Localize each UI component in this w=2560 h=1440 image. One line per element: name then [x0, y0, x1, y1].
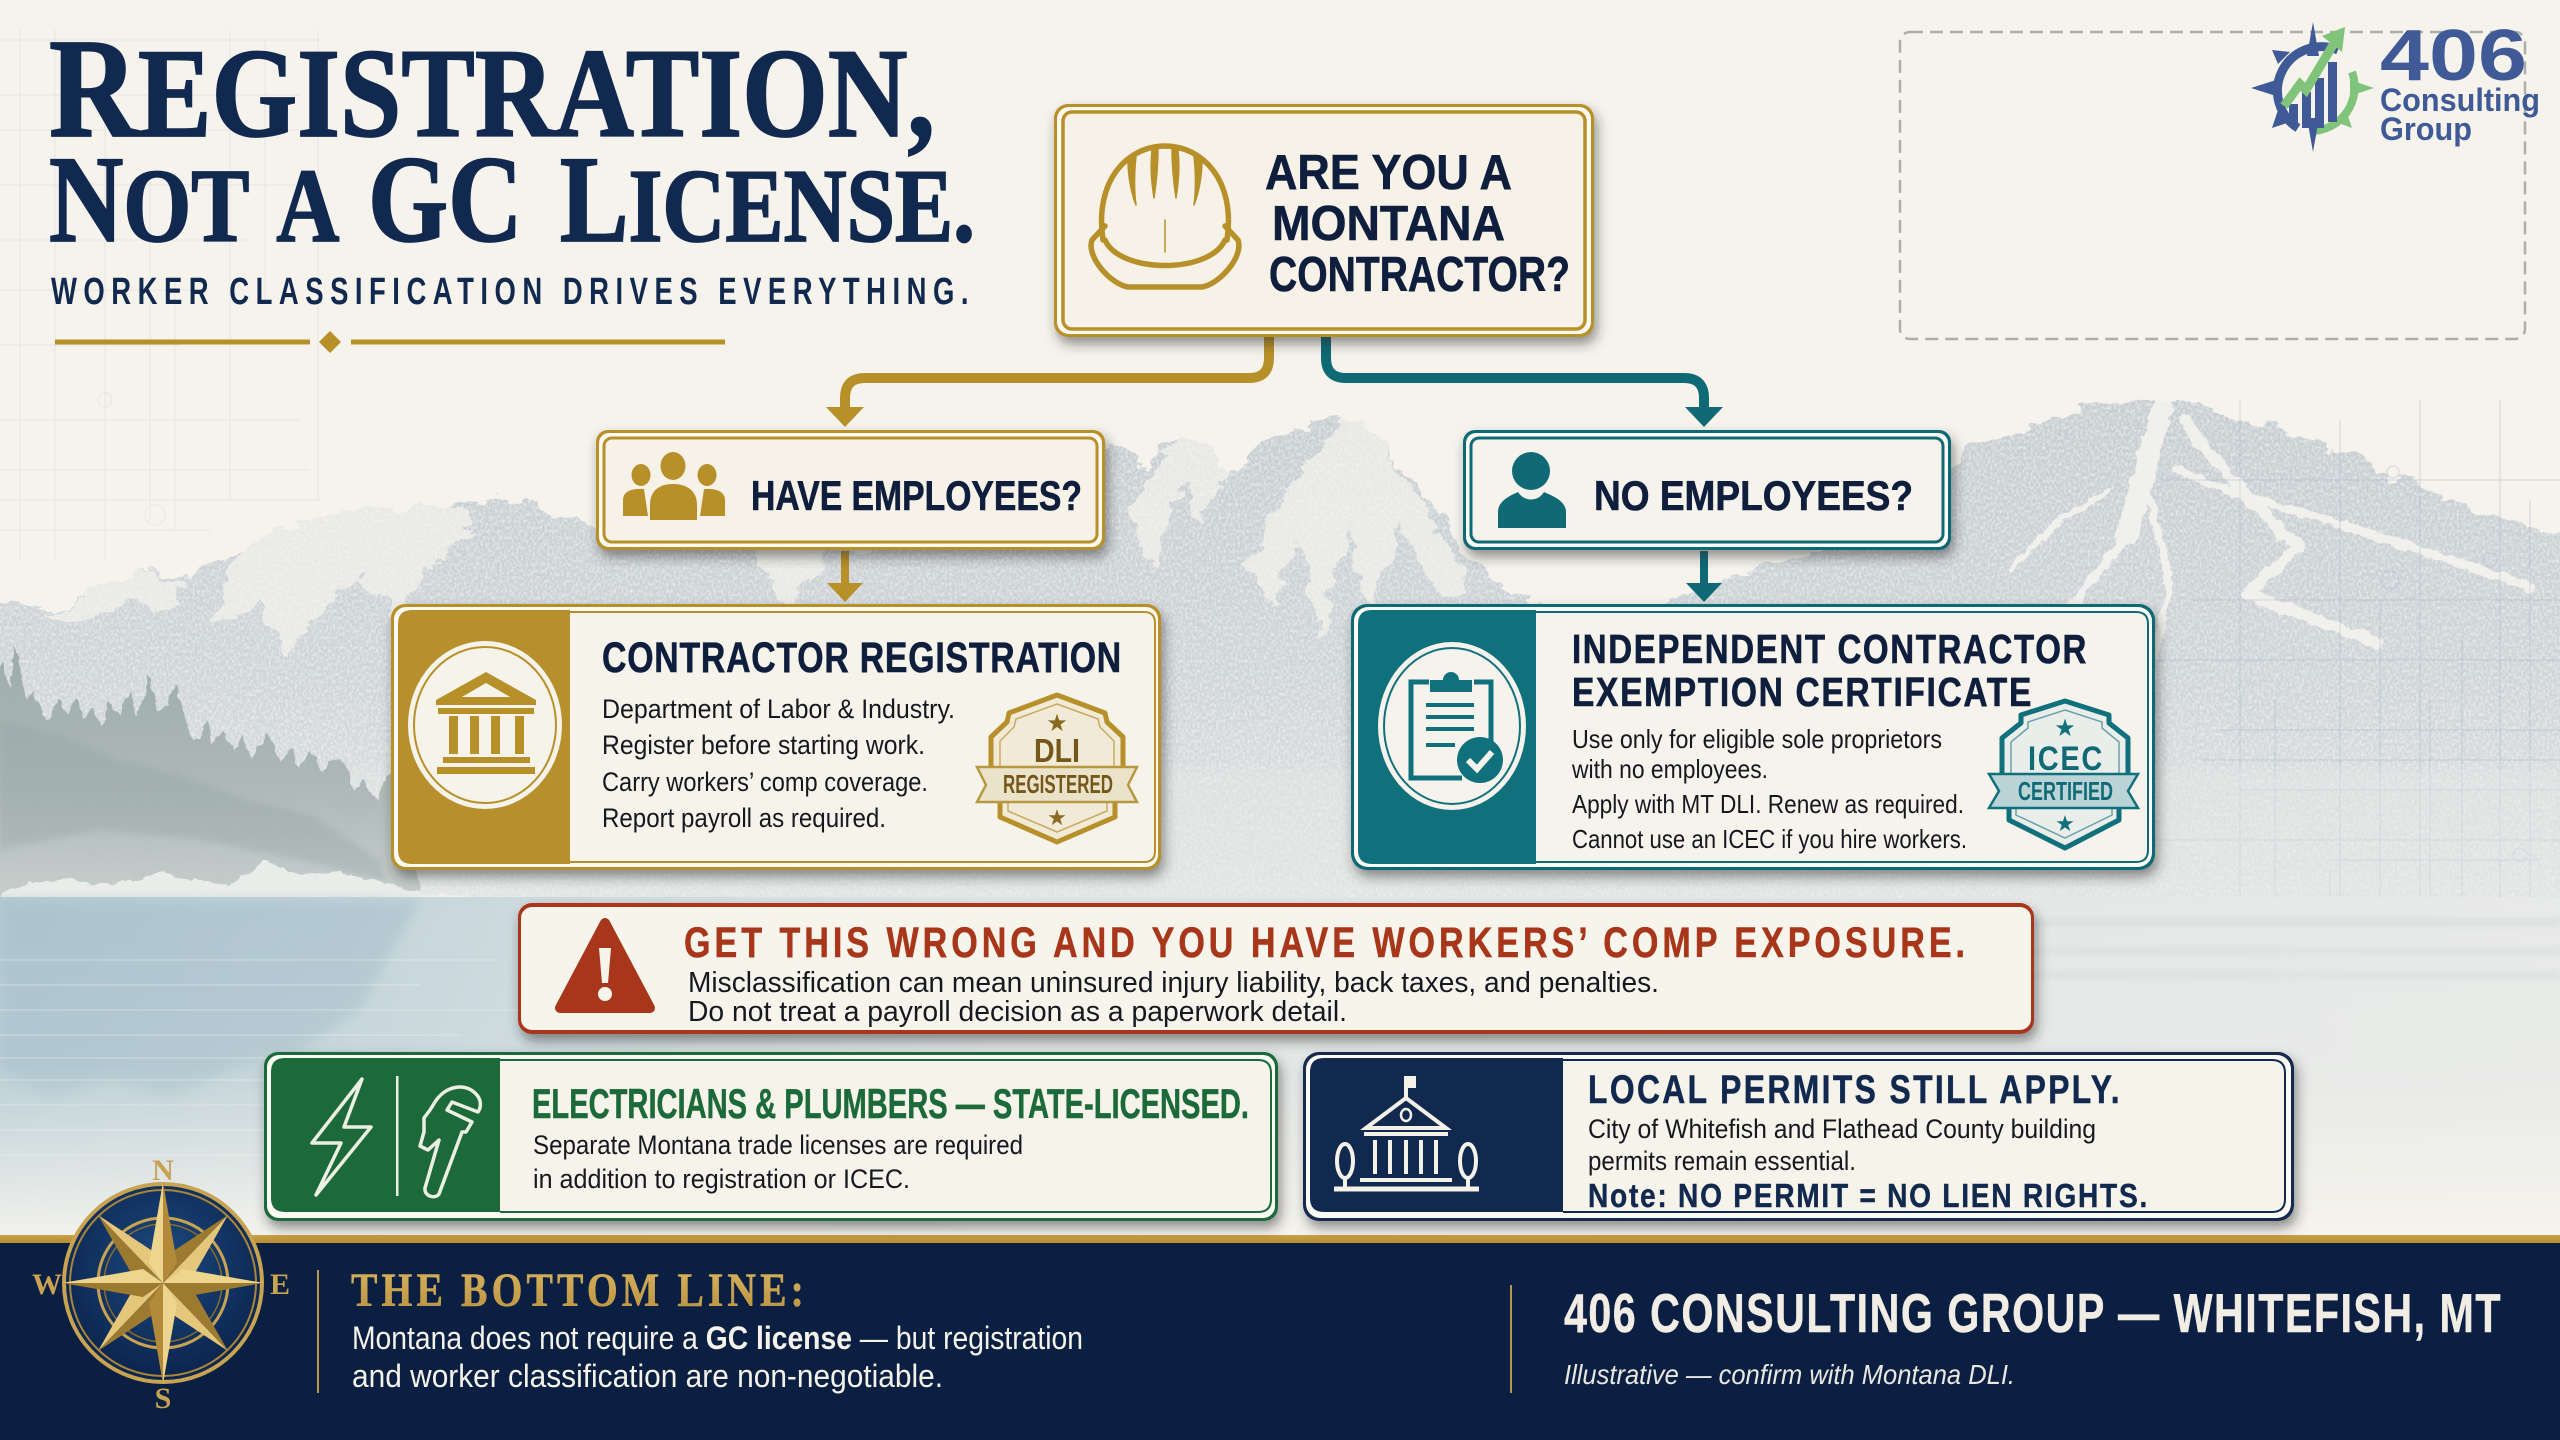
question text: ARE YOU A	[1265, 146, 1512, 200]
logo wordmark: Group	[2380, 111, 2472, 147]
body text: Separate Montana trade licenses are required	[533, 1130, 1023, 1160]
heading: LOCAL PERMITS STILL APPLY.	[1588, 1068, 2122, 1112]
title ornament	[55, 331, 725, 353]
logo	[2251, 16, 2540, 152]
body text: Misclassification can mean uninsured injury liability, back taxes, and penalties.	[688, 967, 1659, 999]
footer: bottom line	[317, 1264, 1083, 1394]
body text	[533, 1130, 1023, 1194]
label: NO EMPLOYEES?	[1594, 472, 1913, 519]
body text	[602, 694, 955, 833]
heading: ELECTRICIANS & PLUMBERS — STATE-LICENSED.	[532, 1080, 1249, 1127]
badge: ICEC certified: CERTIFIED	[2018, 776, 2113, 806]
body text: Carry workers’ comp coverage.	[602, 767, 928, 797]
logo wordmark: 406	[2380, 16, 2527, 96]
heading: INDEPENDENT CONTRACTOR	[1572, 626, 2088, 672]
heading	[1572, 626, 2088, 715]
icon: person	[1498, 452, 1566, 528]
icon: group of people	[623, 452, 725, 520]
heading: CONTRACTOR REGISTRATION	[602, 634, 1122, 682]
title	[49, 9, 975, 268]
panel: electricians and plumbers	[264, 1052, 1278, 1221]
body text: City of Whitefish and Flathead County building	[1588, 1114, 2096, 1144]
badge: ICEC certified: ★	[2055, 812, 2075, 837]
body text: Do not treat a payroll decision as a paperwork detail.	[688, 996, 1347, 1028]
icon: pipe wrench	[420, 1087, 480, 1197]
background: forest	[0, 645, 500, 902]
disclaimer: Illustrative — confirm with Montana DLI.	[1564, 1359, 2015, 1390]
badge: DLI registered: REGISTERED	[1003, 769, 1113, 799]
badge: DLI registered	[977, 695, 1137, 842]
cardinal letters: N	[152, 1154, 174, 1187]
cardinal letters: S	[155, 1382, 171, 1415]
body text: Report payroll as required.	[602, 803, 886, 833]
heading: GET THIS WRONG AND YOU HAVE WORKERS’ COMP EXPOSURE.	[684, 919, 1969, 967]
logo wordmark	[2380, 16, 2540, 147]
body text: in addition to registration or ICEC.	[533, 1164, 910, 1194]
body text: Apply with MT DLI. Renew as required.	[1572, 789, 1964, 819]
cardinal letters: E	[270, 1268, 290, 1301]
heading: THE BOTTOM LINE:	[351, 1264, 808, 1317]
title: REGISTRATION,	[49, 9, 935, 167]
cardinal letters: W	[32, 1268, 62, 1301]
body text: Department of Labor & Industry.	[602, 694, 955, 724]
divider	[396, 1076, 398, 1196]
icon: lightning bolt	[312, 1079, 371, 1195]
badge: DLI registered: ★	[1046, 709, 1068, 737]
panel: warning	[518, 903, 2034, 1034]
question text: MONTANA	[1272, 197, 1505, 251]
body text: Register before starting work.	[602, 730, 925, 760]
body text	[352, 1320, 1083, 1394]
cardinal letters	[32, 1154, 290, 1415]
note: Note: NO PERMIT = NO LIEN RIGHTS.	[1588, 1177, 2149, 1214]
arrow: gold to registration	[827, 551, 863, 602]
icon: warning triangle	[560, 923, 650, 1008]
icon: compass rose	[32, 1154, 290, 1415]
placeholder dashed box	[1900, 32, 2525, 339]
background: lake	[0, 897, 2560, 1237]
panel: independent contractor exemption	[1351, 604, 2155, 870]
badge: ICEC certified: ICEC	[2028, 740, 2104, 778]
body text	[688, 967, 1659, 1028]
badge: ICEC certified	[1989, 701, 2138, 848]
panel: local permits	[1303, 1052, 2294, 1221]
footer band	[0, 1235, 2560, 1440]
icon: temple seal	[408, 641, 562, 809]
main points	[62, 1182, 264, 1384]
body text: and worker classification are non-negotiable.	[352, 1358, 943, 1394]
icon: clipboard seal	[1378, 642, 1526, 810]
icon: government building	[1334, 1076, 1479, 1189]
arrow: teal branch	[1326, 337, 1723, 427]
body text: Montana does not require a GC license — but registration	[352, 1320, 1083, 1356]
background: mountains	[0, 399, 2560, 905]
background: blueprint lines lower right	[2120, 400, 2560, 1235]
arrow: teal to ICEC	[1686, 551, 1722, 602]
question text: CONTRACTOR?	[1269, 248, 1570, 302]
panel: have employees	[596, 430, 1105, 550]
background: blueprint lines top left	[0, 30, 320, 560]
subtitle: WORKER CLASSIFICATION DRIVES EVERYTHING.	[51, 271, 975, 313]
title: NOT A GC LICENSE.	[49, 131, 975, 268]
body text: Use only for eligible sole proprietors	[1572, 724, 1942, 754]
body text	[1588, 1114, 2096, 1176]
background: haze	[0, 770, 2560, 900]
body text	[1571, 724, 1967, 854]
heading: EXEMPTION CERTIFICATE	[1572, 669, 2033, 715]
body text: permits remain essential.	[1588, 1146, 1856, 1176]
badge: DLI registered: DLI	[1034, 732, 1080, 769]
logo compass mark	[2251, 22, 2374, 152]
question text	[1265, 146, 1570, 302]
ski runs	[2010, 408, 2533, 760]
badge: ICEC certified: ★	[2054, 714, 2076, 742]
arrow: gold branch	[826, 337, 1269, 427]
icon: hard hat	[1091, 146, 1239, 287]
label: HAVE EMPLOYEES?	[751, 472, 1082, 519]
panel: no employees	[1463, 430, 1951, 550]
diagonal points	[98, 1215, 228, 1351]
footer: company	[1510, 1282, 2502, 1393]
badge: DLI registered: ★	[1047, 806, 1067, 831]
body text: Cannot use an ICEC if you hire workers.	[1572, 824, 1967, 854]
logo wordmark: Consulting	[2380, 82, 2540, 118]
panel: are you a contractor	[1054, 104, 1594, 337]
panel: contractor registration	[391, 604, 1161, 870]
body text: with no employees.	[1571, 754, 1768, 784]
